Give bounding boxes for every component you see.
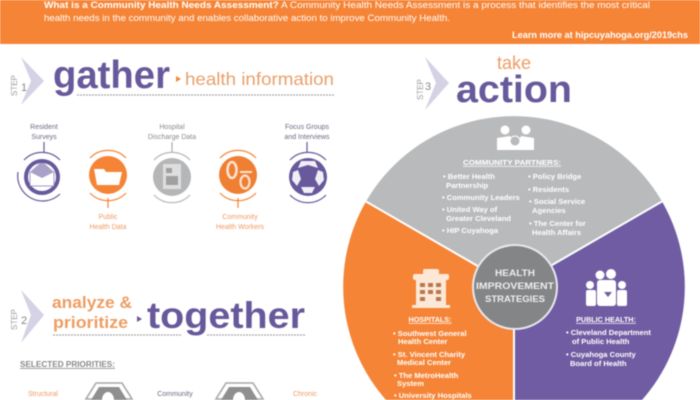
right partners list: • The Center for [529, 219, 586, 228]
hospitals list: • St. Vincent Charity [393, 350, 466, 359]
hexagon icon [86, 383, 132, 399]
wheel segment: community partners [366, 116, 662, 287]
left partners list: Partnership [446, 181, 489, 190]
icon: resident surveys: Surveys [31, 134, 57, 141]
public health list [566, 328, 651, 368]
hub label: IMPROVEMENT [476, 281, 555, 291]
public health list: Board of Health [570, 359, 627, 368]
prioritize title: prioritize [53, 313, 128, 332]
priorities row [28, 383, 318, 400]
action title: action [456, 69, 572, 111]
step 1 number: 1 [21, 82, 27, 94]
icon: hospital discharge data: Discharge Data [148, 134, 196, 141]
right partners list: • Policy Bridge [528, 172, 581, 181]
step 3 label: STEP [416, 79, 425, 100]
icon: public health data [89, 150, 127, 231]
step 3 heading [416, 53, 572, 111]
left partners list: • Community Leaders [442, 193, 520, 202]
public health heading: PUBLIC HEALTH: [576, 315, 636, 324]
step 3 number: 3 [425, 81, 431, 93]
icon: hospital discharge data: Hospital [159, 124, 185, 131]
public health list: of Public Health [572, 337, 630, 346]
hospitals list: • University Hospitals [394, 391, 472, 400]
hub label: STRATEGIES [485, 294, 545, 304]
hexagon icon [216, 383, 263, 399]
community label: Community [157, 391, 193, 398]
left partners list: • HIP Cuyahoga [442, 226, 499, 235]
hospitals list: Health Center [398, 337, 447, 346]
icon: focus groups soccer ball [284, 124, 330, 203]
icon: family [586, 269, 627, 306]
icon: hospital discharge data [148, 124, 196, 203]
take subtitle: take [497, 53, 531, 73]
left partners list [442, 172, 520, 235]
hospitals list: • The MetroHealth [394, 371, 459, 380]
step 2 label: STEP [10, 309, 19, 330]
icon: handshake partners [497, 126, 534, 150]
hospitals list: • Southwest General [393, 329, 467, 338]
step 2 chevron [21, 290, 44, 343]
public health panel [566, 269, 651, 368]
step 3 chevron [425, 57, 449, 110]
together title: together [147, 295, 305, 336]
icon: resident surveys [18, 124, 60, 201]
gather icons [18, 124, 330, 231]
step 2 heading [10, 290, 305, 343]
right partners list: • Residents [528, 185, 569, 194]
right partners list [528, 172, 586, 237]
hub label [476, 268, 555, 304]
right partners list: Agencies [532, 206, 566, 215]
small arrow [176, 76, 181, 82]
strategy wheel [343, 116, 685, 400]
icon: public health data: Public [98, 214, 118, 221]
icon: hospital building [412, 269, 450, 308]
left partners list: • Better Health [443, 172, 495, 181]
step 1 label: STEP [10, 75, 19, 96]
banner intro text: What is a Community Health Needs Assessment? A Community Health Needs Assessment is a process that identifies the most critical [44, 0, 650, 10]
center hub [473, 245, 557, 329]
icon: community health workers: Community [222, 214, 258, 221]
icon: focus groups soccer ball: Focus Groups [285, 124, 329, 131]
wheel segment: public health [514, 202, 685, 400]
hospitals heading: HOSPITALS: [408, 315, 452, 324]
icon: community health workers [216, 150, 265, 231]
hub label: HEALTH [495, 268, 535, 278]
step 1 chevron [21, 57, 44, 105]
community partners panel [442, 126, 586, 237]
banner second line: health needs in the community and enables collaborative action to improve Community Health. [44, 13, 450, 23]
right partners list: Health Affairs [532, 228, 581, 237]
public health list: • Cuyahoga County [566, 350, 637, 359]
structural label: Structural [28, 391, 58, 398]
icon: resident surveys: Resident [30, 124, 58, 131]
community partners heading: COMMUNITY PARTNERS: [463, 158, 561, 167]
wheel segment: hospitals [343, 202, 514, 400]
hospitals list: System [397, 379, 424, 388]
right partners list: • Social Service [529, 197, 585, 206]
step 2 number: 2 [21, 315, 27, 327]
left partners list: • United Way of [442, 205, 498, 214]
step 1 heading [10, 54, 334, 105]
hospitals list [393, 329, 472, 400]
chronic label: Chronic [293, 391, 318, 398]
icon: community health workers: Health Workers [216, 224, 265, 231]
small arrow [137, 316, 142, 322]
selected priorities heading: SELECTED PRIORITIES: [20, 360, 115, 369]
left partners list: Greater Cleveland [446, 214, 511, 223]
hospitals list: Medical Center [397, 358, 451, 367]
gather title: gather [53, 54, 170, 97]
icon: focus groups soccer ball: and Interviews [284, 134, 330, 141]
public health list: • Cleveland Department [566, 328, 651, 337]
analyze title: analyze & [52, 293, 132, 312]
health information subtitle: health information [185, 69, 334, 89]
header banner [0, 0, 700, 44]
hospitals panel [393, 269, 472, 400]
icon: public health data: Health Data [90, 224, 127, 231]
learn more link: Learn more at hipcuyahoga.org/2019chs [512, 30, 688, 40]
